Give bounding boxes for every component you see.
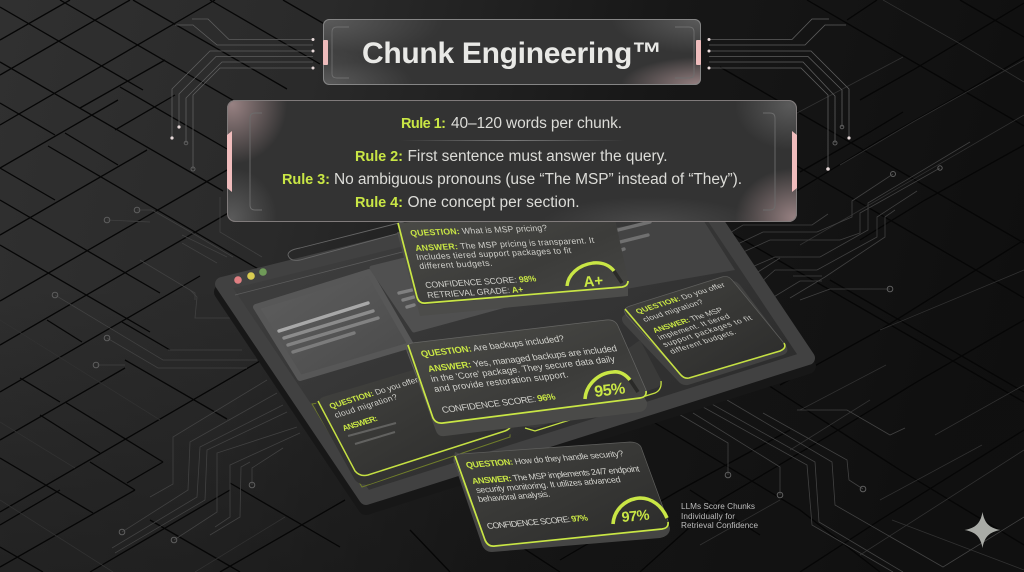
traffic light dots	[234, 268, 267, 284]
card: what is MSP pricing: RETRIEVAL GRADE: A+	[426, 284, 524, 300]
rules brackets	[250, 113, 775, 210]
toolbar rule	[235, 232, 480, 295]
caption: LLMs Score Chunks	[681, 502, 755, 511]
title corner brackets	[332, 27, 694, 78]
right content panel	[372, 232, 560, 330]
card: handle security	[453, 442, 670, 552]
caption: Retrieval Confidence	[681, 521, 758, 530]
card: backups included: and provide restoration support.	[432, 370, 570, 394]
rule 4: One concept per section.	[408, 194, 580, 211]
rule 4: Rule 4:	[355, 195, 403, 211]
card: handle security: ANSWER: The MSP implements 24/7 endpoint	[470, 464, 641, 486]
card: backups included	[407, 320, 647, 436]
title text: Chunk Engineering™	[362, 37, 662, 70]
left panel text lines	[279, 303, 378, 352]
card: cloud migration (left, blurred)	[312, 362, 515, 487]
title panel	[323, 19, 701, 85]
card: what is MSP pricing	[397, 205, 628, 316]
card: cloud migration (right): QUESTION: Do you offer	[634, 281, 727, 316]
window body	[222, 178, 808, 507]
rule 1: 40–120 words per chunk.	[451, 115, 622, 132]
card: backups included: 95%	[593, 380, 626, 401]
upper right bars	[585, 215, 735, 290]
gauge: 95%	[585, 372, 638, 399]
card: cloud migration (left, blurred): cloud migration?	[333, 392, 399, 420]
blurred answer lines	[348, 423, 396, 444]
card: what is MSP pricing: CONFIDENCE SCORE: 98%	[424, 274, 538, 290]
rule 1: Rule 1:	[401, 116, 446, 132]
card: handle security: CONFIDENCE SCORE: 97%	[485, 513, 589, 531]
card: behind main, peeking right	[520, 340, 661, 431]
pink tabs	[323, 40, 701, 65]
card: what is MSP pricing: ANSWER: The MSP pricing is transparent. It	[414, 235, 596, 253]
card: handle security: QUESTION: How do they handle security?	[464, 449, 625, 470]
left content panel	[256, 272, 411, 378]
gauge: A+	[567, 263, 622, 286]
icon: sparkle star	[964, 512, 1000, 548]
card: what is MSP pricing: Includes tiered support packages to fit	[415, 245, 573, 262]
card: handle security: security monitoring. It utilizes advanced	[474, 475, 622, 495]
browser window	[222, 170, 808, 507]
rule 3: Rule 3:	[282, 172, 330, 188]
caption	[681, 502, 758, 530]
rule 3: No ambiguous pronouns (use “The MSP” instead of “They”).	[334, 171, 742, 188]
card: cloud migration (right): implement. It tiered	[656, 312, 732, 342]
card: cloud migration (right): support packages to fit	[661, 314, 755, 349]
right panel text lines	[399, 290, 414, 307]
card: what is MSP pricing: A+	[583, 272, 604, 291]
card: cloud migration (left, blurred): QUESTION: Do you offer	[328, 376, 420, 411]
card: handle security: behavioral analysis.	[476, 489, 551, 504]
card: backups included: in the 'Core' package. They secure data daily	[429, 354, 617, 384]
card: what is MSP pricing: QUESTION: What is MSP pricing?	[409, 223, 548, 238]
caption: Individually for	[681, 512, 735, 521]
card: what is MSP pricing: different budgets.	[418, 258, 493, 271]
card: backups included: QUESTION: Are backups included?	[419, 334, 566, 359]
rule 2: Rule 2:	[355, 149, 403, 165]
circuit terminals	[52, 38, 942, 543]
card: backups included: CONFIDENCE SCORE: 96%	[440, 392, 557, 415]
rule 2: First sentence must answer the query.	[408, 148, 668, 165]
divider	[400, 140, 625, 141]
card: cloud migration (right): cloud migration?	[641, 298, 706, 324]
gauge: 97%	[613, 498, 667, 524]
card: cloud migration (left, blurred): ANSWER:	[341, 414, 379, 433]
rules panel	[227, 100, 797, 222]
pink tabs	[227, 131, 797, 192]
card: cloud migration (right): different budgets.	[668, 328, 738, 356]
card: handle security: 97%	[621, 508, 650, 526]
card: backups included: ANSWER: Yes, managed backups are included	[426, 344, 618, 374]
card: cloud migration (right): ANSWER: The MSP	[651, 306, 725, 335]
card: cloud migration (right)	[622, 276, 787, 385]
address bar	[288, 205, 475, 260]
